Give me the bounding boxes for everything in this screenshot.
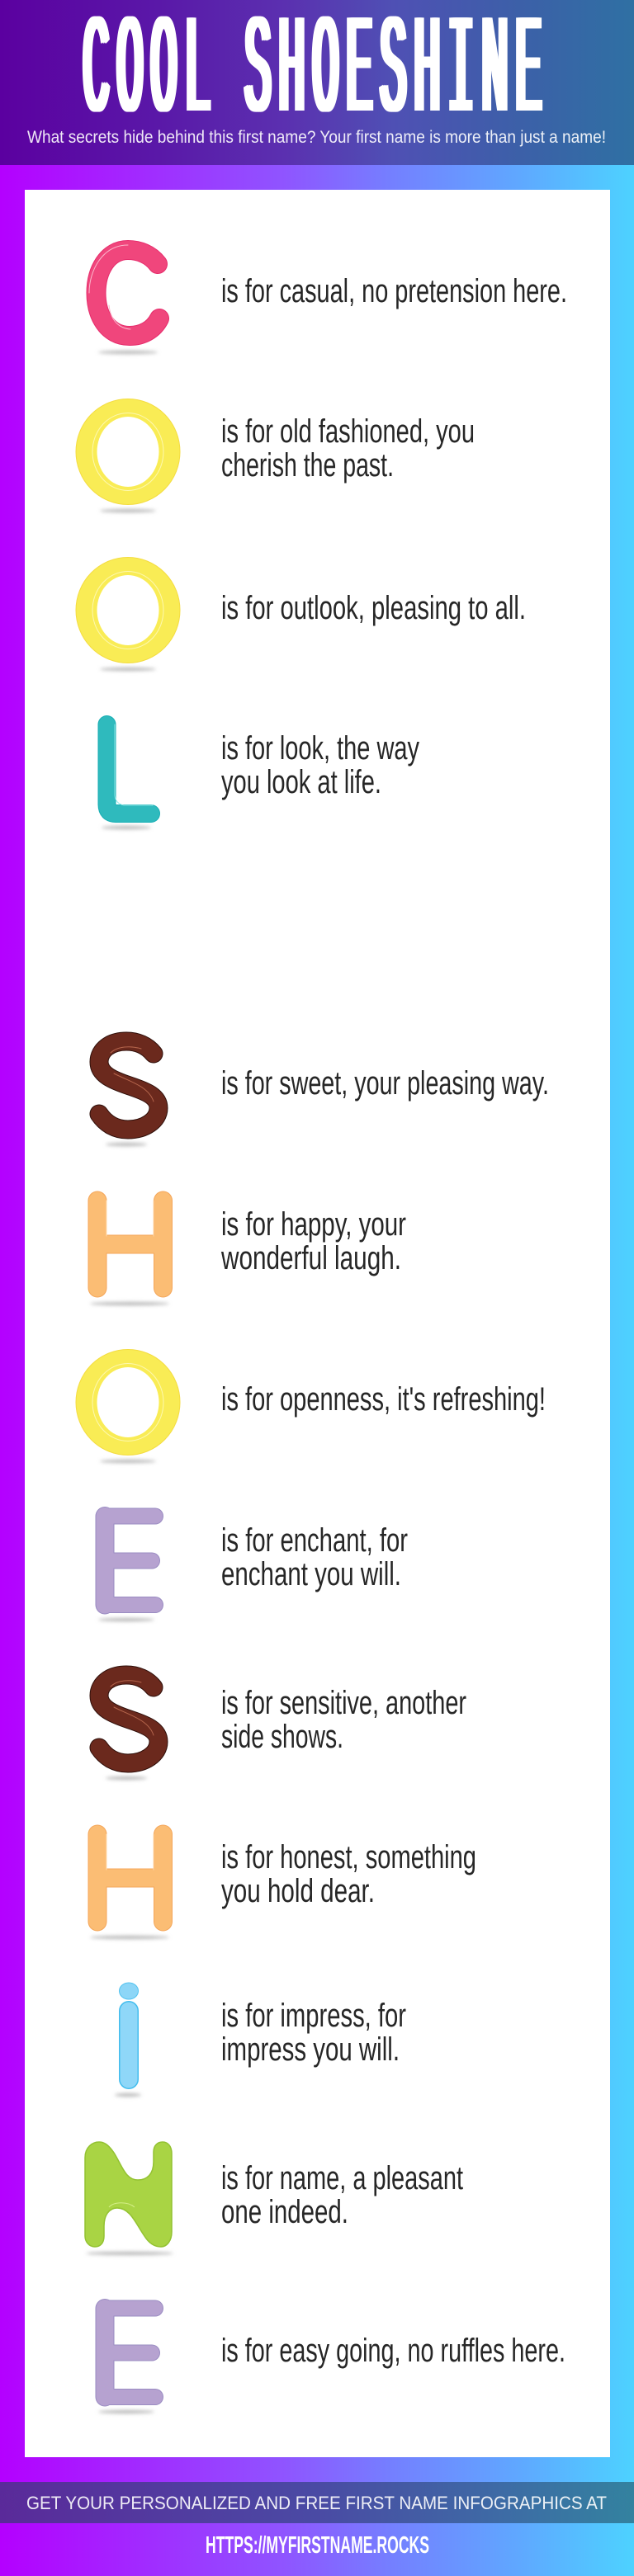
icon: letter S — [99, 1675, 158, 1780]
icon: letter N — [85, 2142, 173, 2255]
text: H line continued: you hold dear. — [221, 1873, 375, 1909]
footer band — [0, 2482, 634, 2523]
text: E line: is for enchant, for — [221, 1522, 408, 1559]
text: O line: is for old fashioned, you — [221, 413, 475, 450]
header band — [0, 0, 634, 165]
icon: letter O — [76, 1350, 180, 1463]
text: O line: is for outlook, pleasing to all. — [221, 590, 526, 626]
text: L line: is for look, the way — [221, 730, 419, 767]
icon: letter O — [76, 558, 180, 671]
text: i line continued: impress you will. — [221, 2031, 400, 2068]
footer url: HTTPS://MYFIRSTNAME.ROCKS — [206, 2532, 429, 2559]
text: S line: is for sensitive, another — [221, 1685, 466, 1721]
icon: letter C — [89, 245, 159, 354]
text: H line: is for honest, something — [221, 1839, 476, 1875]
icon: letter H — [90, 1834, 169, 1939]
text: S line continued: side shows. — [221, 1719, 343, 1755]
text: i line: is for impress, for — [221, 1998, 406, 2034]
icon: letter E — [98, 2309, 155, 2413]
text: L line continued: you look at life. — [221, 764, 381, 800]
text: H line: is for happy, your — [221, 1206, 406, 1243]
icon: letter S — [99, 1041, 158, 1146]
text: H line continued: wonderful laugh. — [220, 1240, 401, 1276]
text: N line continued: one indeed. — [221, 2194, 348, 2230]
icon: letter L — [102, 724, 153, 829]
text: N line: is for name, a pleasant — [221, 2160, 463, 2196]
text: E line continued: enchant you will. — [221, 1556, 401, 1592]
icon: letter E — [98, 1517, 155, 1621]
text: O line continued: cherish the past. — [221, 447, 394, 484]
icon: letter O — [76, 399, 180, 512]
icon: letter H — [90, 1201, 169, 1305]
icon: letter i — [115, 1983, 141, 2097]
footer call to action: GET YOUR PERSONALIZED AND FREE FIRST NAME INFOGRAPHICS AT — [26, 2493, 607, 2513]
